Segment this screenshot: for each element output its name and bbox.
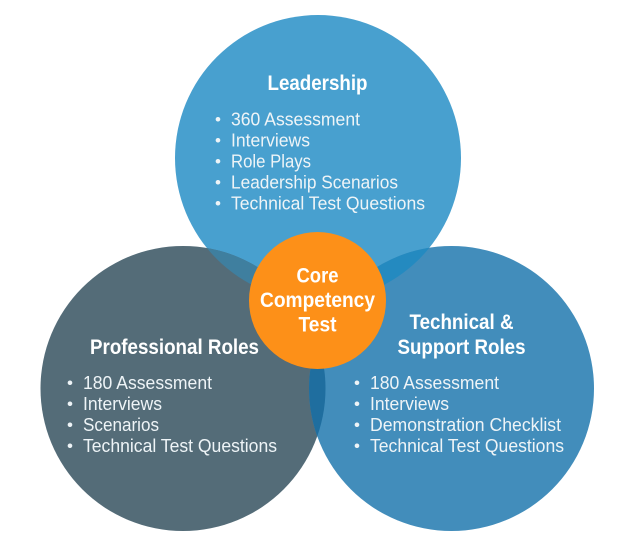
list: technical and support roles items: • (354, 374, 360, 392)
list: leadership items: Interviews (231, 130, 310, 150)
list: professional roles items: Scenarios (83, 415, 159, 435)
list: professional roles items: 180 Assessment (83, 373, 212, 393)
list: leadership items: • (215, 110, 221, 129)
list: leadership items: Technical Test Questions (231, 194, 425, 214)
list: professional roles items: • (67, 436, 73, 456)
circle: core competency test (249, 232, 386, 369)
heading: leadership: Leadership (268, 72, 368, 95)
list: leadership items: 360 Assessment (231, 110, 360, 130)
overlap: professional and technical (309, 368, 326, 436)
label: core competency test (260, 264, 375, 336)
list: professional roles items: Interviews (83, 394, 162, 414)
heading: professional roles: Professional Roles (90, 336, 259, 359)
list: professional roles items: • (67, 374, 73, 392)
list: leadership items: Leadership Scenarios (231, 172, 398, 192)
overlap: leadership and professional roles (207, 248, 258, 284)
list: technical and support roles items (354, 373, 564, 456)
list: leadership items: • (215, 131, 221, 150)
list: leadership items: • (215, 194, 221, 213)
panel: professional roles text (67, 336, 277, 456)
list: technical and support roles items: Technical Test Questions (370, 436, 564, 456)
heading: technical and support roles (398, 311, 526, 359)
label: core competency test: Core (296, 264, 338, 288)
list: professional roles items (67, 373, 277, 456)
label: core competency test: Test (298, 314, 337, 336)
list: leadership items (215, 110, 425, 214)
circle: technical and support roles (309, 246, 594, 531)
list: professional roles items: Technical Test Questions (83, 436, 277, 456)
overlap: leadership and technical (377, 248, 430, 285)
list: technical and support roles items: Interviews (370, 394, 449, 414)
list: leadership items: Role Plays (231, 152, 311, 172)
list: professional roles items: • (67, 394, 73, 414)
list: technical and support roles items: • (354, 394, 360, 414)
list: leadership items: • (215, 173, 221, 192)
panel: leadership text (215, 72, 425, 214)
circle: professional roles (40, 246, 326, 531)
list: professional roles items: • (67, 416, 73, 434)
panel: technical and support roles text (354, 311, 564, 456)
heading: technical and support roles: Technical & (410, 311, 514, 334)
list: technical and support roles items: • (354, 436, 360, 456)
circle: leadership (175, 15, 461, 301)
list: technical and support roles items: Demonstration Checklist (370, 415, 561, 435)
list: technical and support roles items: • (354, 416, 360, 434)
label: core competency test: Competency (260, 289, 375, 312)
list: leadership items: • (215, 152, 221, 171)
heading: technical and support roles: Support Roles (398, 336, 526, 359)
list: technical and support roles items: 180 Assessment (370, 373, 499, 393)
